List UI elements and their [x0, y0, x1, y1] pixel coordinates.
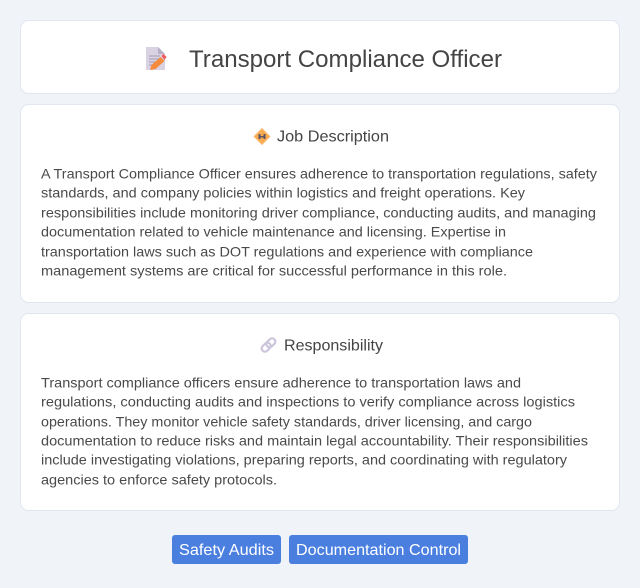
responsibility text: agencies to enforce safety protocols. [41, 472, 277, 488]
tag: safety audits: Safety Audits [179, 542, 274, 559]
responsibility text: operations. They monitor vehicle safety standards, driver licensing, and cargo [41, 414, 532, 430]
job description text: transportation laws such as DOT regulations and experience with compliance [41, 244, 533, 260]
panel: responsibility [20, 314, 620, 510]
job description text: management systems are critical for successful performance in this role. [41, 262, 507, 278]
job description text [41, 166, 597, 278]
job description text: standards, and company policies within logistics and freight operations. Key [41, 184, 525, 200]
responsibility text: Transport compliance officers ensure adherence to transportation laws and [41, 374, 521, 390]
tag: documentation control [289, 535, 468, 564]
tag: safety audits [172, 535, 281, 564]
job description text: A Transport Compliance Officer ensures adherence to transportation regulations, safety [41, 166, 597, 182]
responsibility text: regulations, conducting audits and inspections to verify compliance across logistics [41, 394, 575, 410]
responsibility text: documentation to reduce risks and maintain legal accountability. Their responsibilities [41, 432, 588, 448]
panel: title [20, 20, 620, 94]
job description heading: Job Description [277, 128, 389, 146]
responsibility text [41, 374, 588, 488]
job description text: documentation related to vehicle maintenance and licensing. Expertise in [41, 224, 506, 240]
tag: documentation control: Documentation Control [296, 542, 461, 559]
responsibility text: include investigating violations, preparing reports, and coordinating with regulatory [41, 452, 567, 468]
job description text: responsibilities include monitoring driver compliance, conducting audits, and managing [41, 204, 596, 220]
responsibility heading: Responsibility [284, 338, 383, 354]
icon: link [260, 337, 277, 353]
panel: job description [20, 104, 620, 302]
icon: construction diamond [254, 128, 270, 144]
title text: Transport Compliance Officer [189, 46, 502, 73]
icon: memo with pencil [146, 47, 166, 70]
